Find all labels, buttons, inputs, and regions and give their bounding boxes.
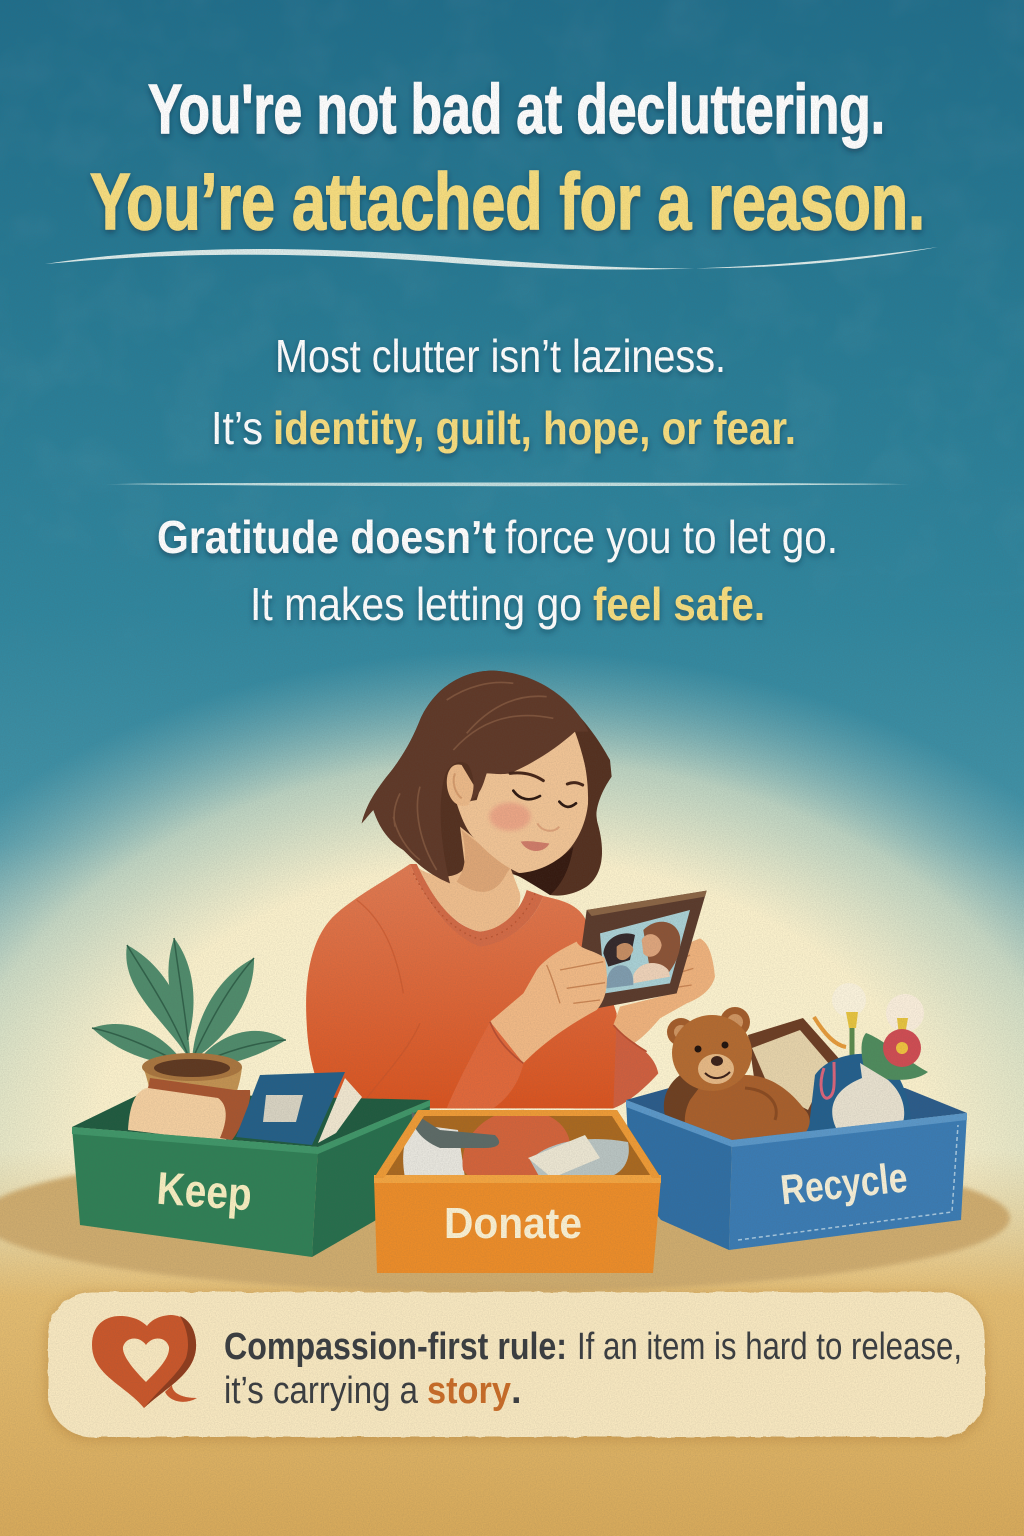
ear xyxy=(447,764,477,806)
vase xyxy=(832,1063,904,1132)
keep bin rim xyxy=(72,1100,430,1154)
callout line 1: Compassion-first rule: xyxy=(224,1326,567,1368)
photo xyxy=(600,910,690,993)
photo frame xyxy=(582,891,707,1008)
sand ground patch xyxy=(0,1144,1010,1292)
leaves xyxy=(92,938,286,1066)
mouth xyxy=(521,841,549,851)
keep bin contents xyxy=(128,1072,362,1145)
photo people xyxy=(603,922,680,988)
right hair lock xyxy=(550,732,599,895)
plant xyxy=(92,938,286,1115)
gratitude line 1: Gratitude doesn’t xyxy=(157,511,496,563)
sweater shoulder seam xyxy=(357,900,420,1107)
gratitude line 1: force you to let go. xyxy=(505,511,838,563)
far sleeve xyxy=(573,1022,658,1108)
frame highlight xyxy=(587,891,707,916)
hair under chin xyxy=(513,847,573,895)
title swoosh underline xyxy=(45,247,938,270)
nose xyxy=(537,823,559,831)
compassion-first callout xyxy=(46,1292,986,1440)
blush xyxy=(489,803,531,831)
gratitude line 1 xyxy=(157,511,838,563)
donate bin rim xyxy=(374,1175,661,1183)
gratitude text block xyxy=(157,511,838,630)
callout line 2: it’s carrying a xyxy=(224,1370,419,1412)
far cuff xyxy=(613,1025,647,1052)
sweater collar xyxy=(410,864,543,947)
front hair xyxy=(362,671,588,883)
hair highlights xyxy=(393,682,553,870)
inner ear xyxy=(454,773,462,798)
recycle bin xyxy=(626,983,967,1250)
callout line 2: . xyxy=(511,1370,522,1412)
near hand fingers xyxy=(547,962,605,1003)
pot rim xyxy=(142,1053,242,1081)
near hand and forearm xyxy=(490,942,607,1063)
woman holding photo xyxy=(306,671,715,1108)
sleeve cuff line xyxy=(490,1022,523,1063)
pot soil xyxy=(154,1059,230,1077)
recycle stitching xyxy=(738,1125,958,1240)
flowers xyxy=(832,983,866,1017)
back hair xyxy=(362,671,612,896)
donate bin side rim xyxy=(374,1110,661,1178)
intro line 1: Most clutter isn’t laziness. xyxy=(275,330,726,382)
closed eyes xyxy=(513,791,576,807)
callout panel shadow xyxy=(46,1294,986,1440)
near sleeve xyxy=(447,1022,523,1108)
keep bin interior xyxy=(72,1093,430,1147)
donate bin interior xyxy=(374,1110,661,1178)
callout text xyxy=(224,1326,962,1412)
keep label: Keep xyxy=(155,1162,254,1220)
callout line 1 xyxy=(224,1326,962,1368)
callout panel xyxy=(48,1292,985,1437)
intro line 2: It’s xyxy=(211,402,263,454)
collar ribbing xyxy=(413,873,535,939)
recycle bin interior xyxy=(626,1085,967,1140)
neck xyxy=(413,827,520,932)
sand floor xyxy=(0,1150,1024,1536)
keep bin right side xyxy=(312,1100,430,1257)
gratitude line 2: feel safe. xyxy=(593,578,765,630)
title xyxy=(90,70,925,246)
donate label: Donate xyxy=(444,1199,582,1248)
intro text block xyxy=(211,330,796,454)
background glow xyxy=(0,620,1024,1536)
callout line 2: story xyxy=(427,1370,511,1412)
cushion xyxy=(748,1018,842,1125)
keep bin xyxy=(72,1072,430,1257)
sweater body xyxy=(306,864,617,1108)
keep bin front xyxy=(72,1127,318,1257)
face xyxy=(457,732,589,874)
gratitude line 2: It makes letting go xyxy=(250,578,582,630)
donate bin contents xyxy=(403,1110,629,1178)
background mottling xyxy=(0,0,1024,720)
recycle bin rim xyxy=(626,1100,967,1147)
leaf veins xyxy=(92,938,286,1065)
recycle bin front xyxy=(729,1113,967,1250)
neck shadow xyxy=(457,830,510,892)
teddy bear xyxy=(664,1007,810,1145)
eyebrows xyxy=(510,773,583,785)
far hand fingers xyxy=(670,955,693,988)
donate bin front xyxy=(374,1178,661,1273)
donate bin xyxy=(374,1110,661,1273)
recycle label: Recycle xyxy=(778,1153,909,1213)
plant pot xyxy=(143,1067,242,1115)
red flower xyxy=(883,1029,921,1067)
far hand and forearm xyxy=(613,938,715,1043)
recycle bin left side xyxy=(626,1100,732,1250)
leaves xyxy=(862,1033,928,1080)
blue bag xyxy=(808,1054,911,1135)
section divider xyxy=(105,482,910,486)
pink loop xyxy=(821,1062,834,1098)
recycle bin contents xyxy=(748,983,928,1135)
icon: heart xyxy=(92,1315,197,1408)
intro line 2: identity, guilt, hope, or fear. xyxy=(273,402,796,454)
